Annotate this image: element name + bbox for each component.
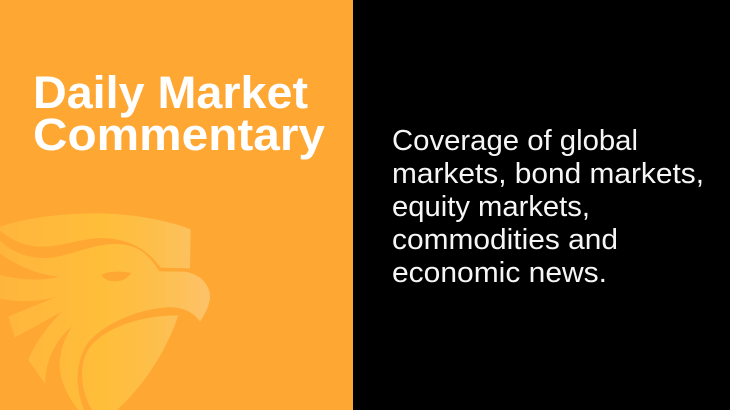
description text: Coverage of global: [392, 125, 638, 157]
description text: equity markets,: [392, 191, 590, 223]
description text: markets, bond markets,: [392, 158, 704, 190]
title: Commentary: [33, 109, 325, 160]
title: Daily Market: [33, 67, 308, 118]
panel: black right: [353, 0, 730, 410]
icon: eagle eye: [102, 272, 131, 281]
description text: [392, 125, 704, 289]
icon: eagle shield logo: [0, 213, 210, 410]
description text: commodities and: [392, 224, 618, 256]
title: [33, 67, 325, 160]
description text: economic news.: [392, 257, 607, 289]
panel: orange left: [0, 0, 353, 410]
